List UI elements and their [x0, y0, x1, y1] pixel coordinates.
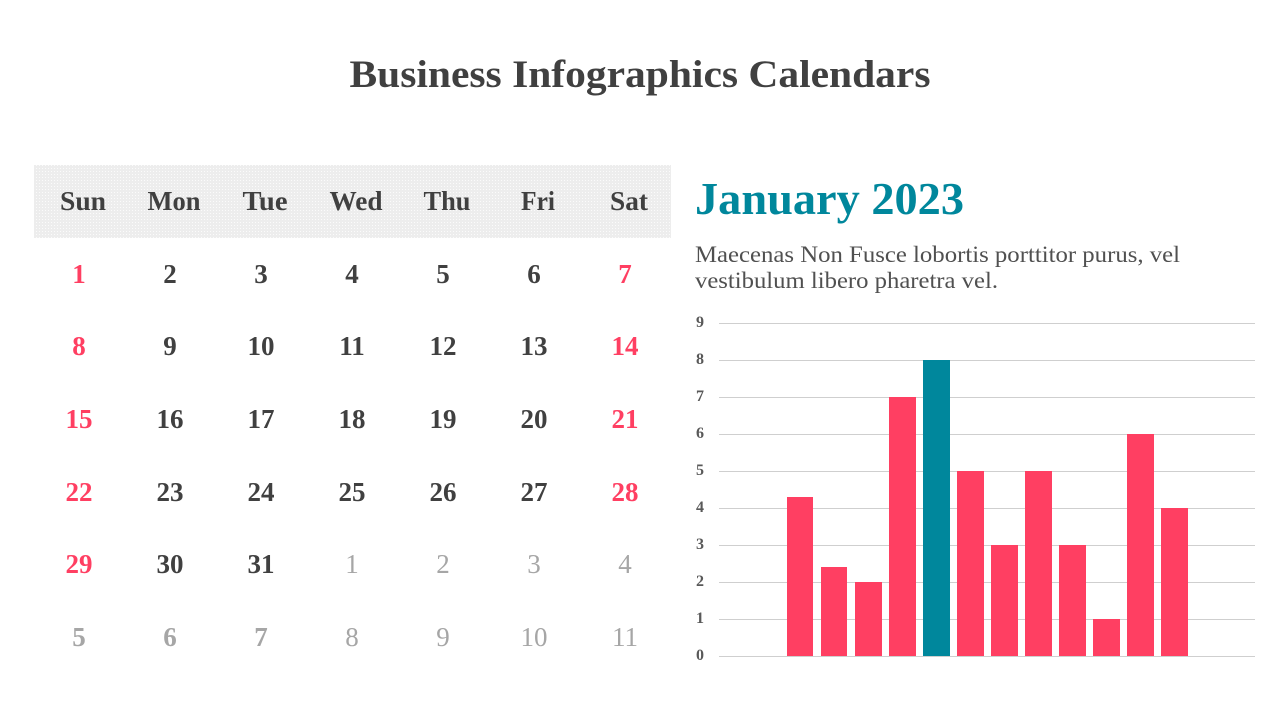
date grid: 5: [72, 622, 86, 652]
weekday header band: Fri: [521, 186, 555, 216]
date grid: 29: [66, 549, 92, 579]
panel: calendar: [34, 165, 671, 652]
weekday header band: Tue: [242, 186, 288, 216]
gridlines and value axis: 1: [696, 610, 704, 627]
weekday header band: Mon: [148, 186, 200, 216]
date grid: 7: [618, 259, 632, 289]
date grid: 8: [345, 622, 359, 652]
description text: [695, 242, 1180, 293]
gridlines and value axis: 7: [696, 388, 704, 405]
date grid: 2: [163, 259, 177, 289]
date grid: 14: [612, 331, 638, 361]
date grid: 12: [430, 331, 456, 361]
bar chart: [696, 314, 1255, 664]
date grid: 19: [430, 404, 456, 434]
date grid: 18: [338, 404, 366, 434]
date grid: 16: [156, 404, 184, 434]
date grid: 4: [345, 259, 359, 289]
date grid: 1: [345, 549, 359, 579]
date grid: 30: [156, 549, 184, 579]
bars: [787, 360, 1188, 656]
title: Business Infographics Calendars: [350, 53, 930, 96]
date grid: 3: [527, 549, 541, 579]
date grid: 11: [612, 622, 638, 652]
date grid: 20: [520, 404, 548, 434]
date grid: [66, 259, 638, 652]
date grid: 25: [338, 477, 366, 507]
date grid: 11: [339, 331, 365, 361]
date grid: 21: [612, 404, 638, 434]
weekday header band: [34, 165, 671, 238]
date grid: 1: [72, 259, 86, 289]
date grid: 7: [254, 622, 268, 652]
gridlines and value axis: 9: [696, 314, 704, 331]
date grid: 6: [527, 259, 541, 289]
description text: Maecenas Non Fusce lobortis porttitor purus, vel: [695, 242, 1180, 267]
date grid: 9: [436, 622, 450, 652]
date grid: 27: [520, 477, 548, 507]
gridlines and value axis: 0: [696, 647, 704, 664]
gridlines and value axis: 6: [696, 425, 704, 442]
date grid: 23: [156, 477, 184, 507]
weekday header band: Thu: [424, 186, 470, 216]
description text: vestibulum libero pharetra vel.: [695, 268, 998, 293]
date grid: 6: [163, 622, 177, 652]
gridlines and value axis: 4: [696, 499, 704, 516]
month heading: January 2023: [695, 173, 964, 224]
date grid: 31: [248, 549, 274, 579]
date grid: 26: [430, 477, 456, 507]
date grid: 13: [520, 331, 548, 361]
date grid: 22: [66, 477, 92, 507]
date grid: 17: [248, 404, 274, 434]
date grid: 3: [254, 259, 268, 289]
gridlines and value axis: 2: [696, 573, 704, 590]
gridlines and value axis: [696, 314, 1255, 664]
date grid: 28: [612, 477, 638, 507]
gridlines and value axis: 3: [696, 536, 704, 553]
date grid: 10: [520, 622, 548, 652]
gridlines and value axis: 5: [696, 462, 704, 479]
gridlines and value axis: 8: [696, 351, 704, 368]
date grid: 8: [72, 331, 86, 361]
date grid: 2: [436, 549, 450, 579]
date grid: 5: [436, 259, 450, 289]
weekday header band: Wed: [330, 186, 382, 216]
weekday header band: Sun: [60, 186, 106, 216]
date grid: 10: [248, 331, 274, 361]
date grid: 15: [66, 404, 92, 434]
date grid: 4: [618, 549, 632, 579]
date grid: 24: [248, 477, 274, 507]
weekday header band: Sat: [610, 186, 648, 216]
date grid: 9: [163, 331, 177, 361]
